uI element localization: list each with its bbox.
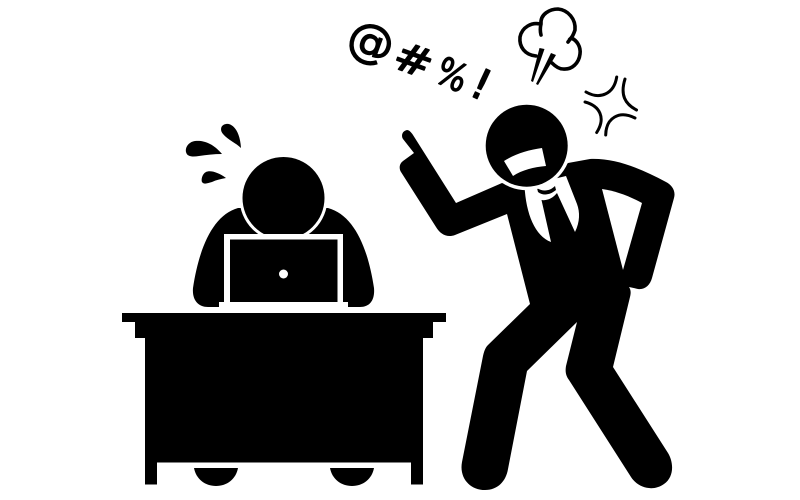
icon: anger vein mark — [585, 77, 636, 135]
boss head — [482, 101, 571, 190]
worker body — [193, 208, 374, 307]
desk — [122, 313, 446, 486]
gap between arm and torso — [602, 189, 642, 270]
office worker — [193, 154, 374, 307]
worker head — [240, 154, 328, 242]
swearing symbols: @ — [340, 8, 402, 74]
open shouting mouth — [504, 148, 546, 176]
angry boss — [400, 101, 675, 490]
swearing symbols: ! — [463, 59, 499, 110]
icon: sweat drops — [186, 124, 241, 184]
boss body — [400, 130, 675, 490]
shirt collar and tie — [524, 176, 579, 242]
swearing symbols: # — [387, 32, 439, 89]
swearing symbols — [340, 8, 499, 110]
swearing symbols: % — [429, 49, 475, 102]
laptop — [219, 234, 348, 307]
icon: steam puff — [520, 9, 580, 85]
